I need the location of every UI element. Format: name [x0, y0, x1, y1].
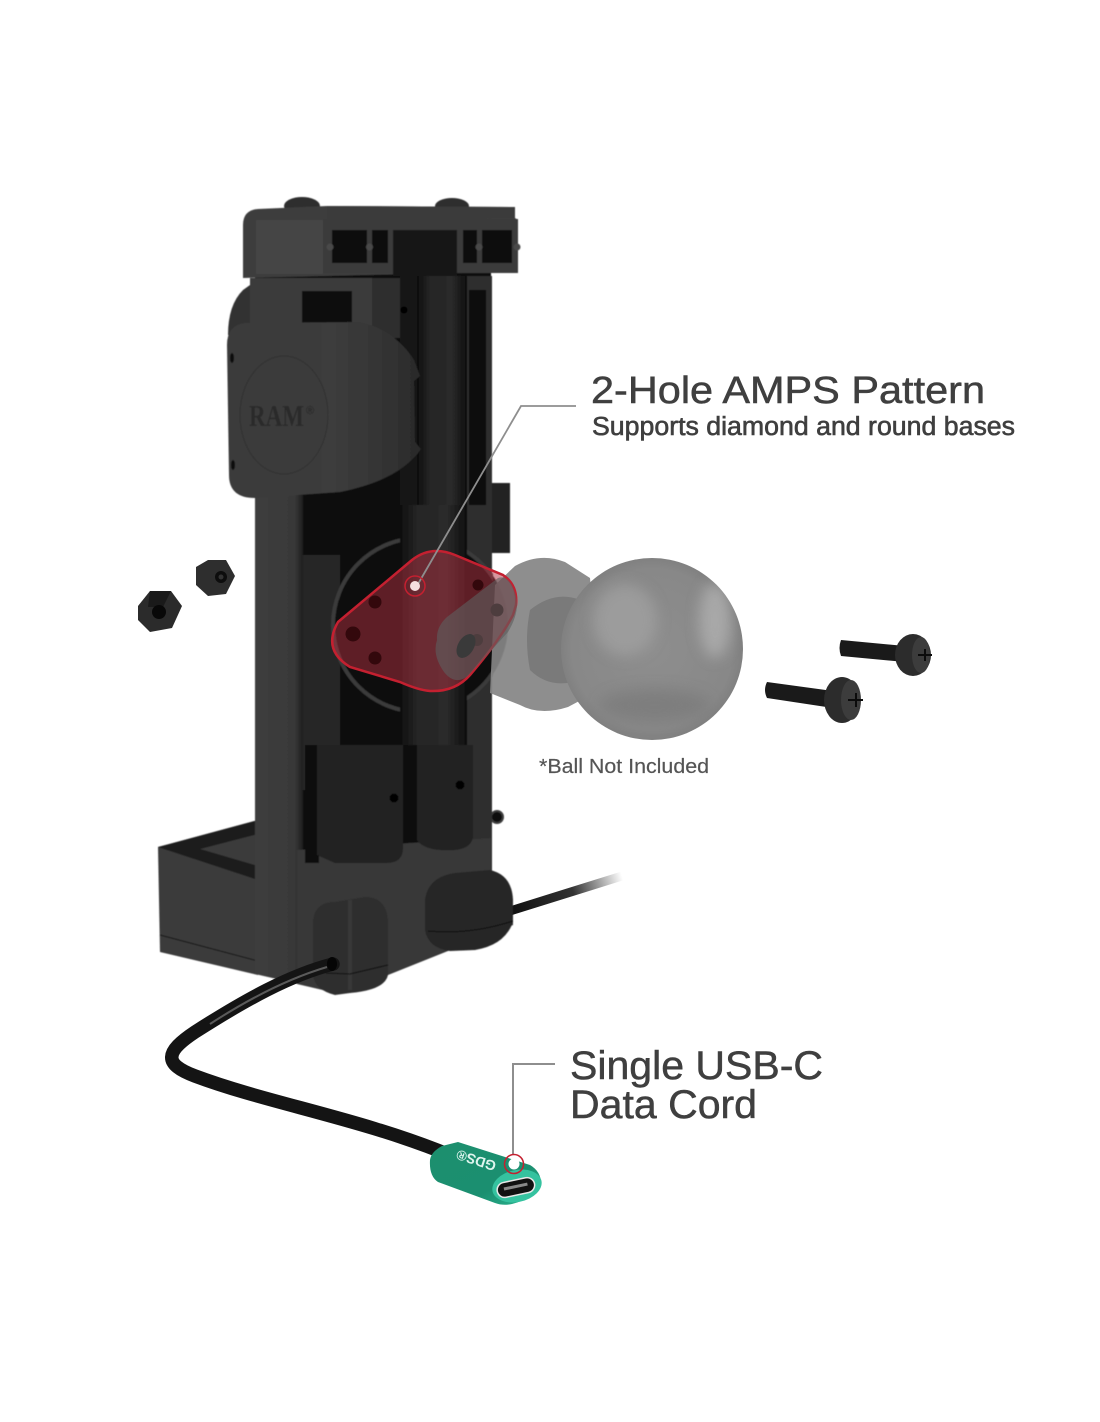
GDS logo: GDS®	[454, 1146, 498, 1174]
ball highlights	[593, 582, 731, 721]
left lower pillar	[255, 480, 303, 985]
RAM cap	[227, 322, 421, 498]
base cap rear	[425, 870, 513, 951]
connector face	[489, 1165, 545, 1207]
rear body	[255, 270, 491, 880]
nut small	[196, 560, 235, 596]
paddle bolt hole	[453, 631, 479, 661]
heading: USB-C cord: Data Cord	[570, 1083, 757, 1127]
ball	[561, 558, 743, 740]
callout: AMPS pattern leader line	[405, 406, 576, 596]
rear cable stub	[510, 876, 622, 911]
right screws	[765, 634, 932, 723]
screw lower	[765, 677, 863, 723]
ball base paddle	[436, 577, 517, 680]
mounting holes	[346, 580, 504, 664]
note: ball not included: *Ball Not Included	[539, 756, 709, 778]
AMPS red diamond overlay	[332, 551, 516, 691]
top screws	[284, 197, 469, 215]
heading: USB-C cord	[570, 1044, 823, 1127]
USB-C cable	[172, 957, 452, 1156]
rear frame	[228, 278, 405, 338]
RAM logo: RAM	[249, 398, 304, 433]
ball base back	[490, 558, 600, 711]
ball mount, semi-transparent	[490, 558, 743, 740]
subheading: supported bases: Supports diamond and round bases	[592, 413, 1015, 441]
lower left rail block	[305, 745, 403, 863]
lower centre rail block	[417, 745, 473, 850]
circular adapter disc	[332, 505, 508, 745]
heading: USB-C cord: Single USB-C	[570, 1044, 823, 1088]
registered mark: ®	[306, 405, 314, 417]
USB-C port	[496, 1176, 536, 1199]
cable entry hole	[327, 957, 337, 971]
screw upper	[840, 634, 932, 676]
nut large	[138, 591, 182, 632]
left hex nuts	[138, 560, 235, 632]
USB-C connector	[430, 1142, 545, 1207]
base tray box	[158, 820, 258, 975]
top bracket	[243, 206, 520, 278]
left band behind adapter	[303, 555, 340, 790]
heading: AMPS pattern: 2-Hole AMPS Pattern	[591, 370, 985, 412]
side tab behind ball	[492, 483, 510, 553]
base cap front	[313, 897, 388, 995]
ball neck	[527, 597, 580, 683]
centre rails	[400, 276, 492, 886]
lower right loop	[491, 811, 503, 823]
mount product render	[158, 197, 520, 995]
front base plate	[297, 838, 513, 994]
callout: USB-C leader line	[504, 1064, 555, 1174]
